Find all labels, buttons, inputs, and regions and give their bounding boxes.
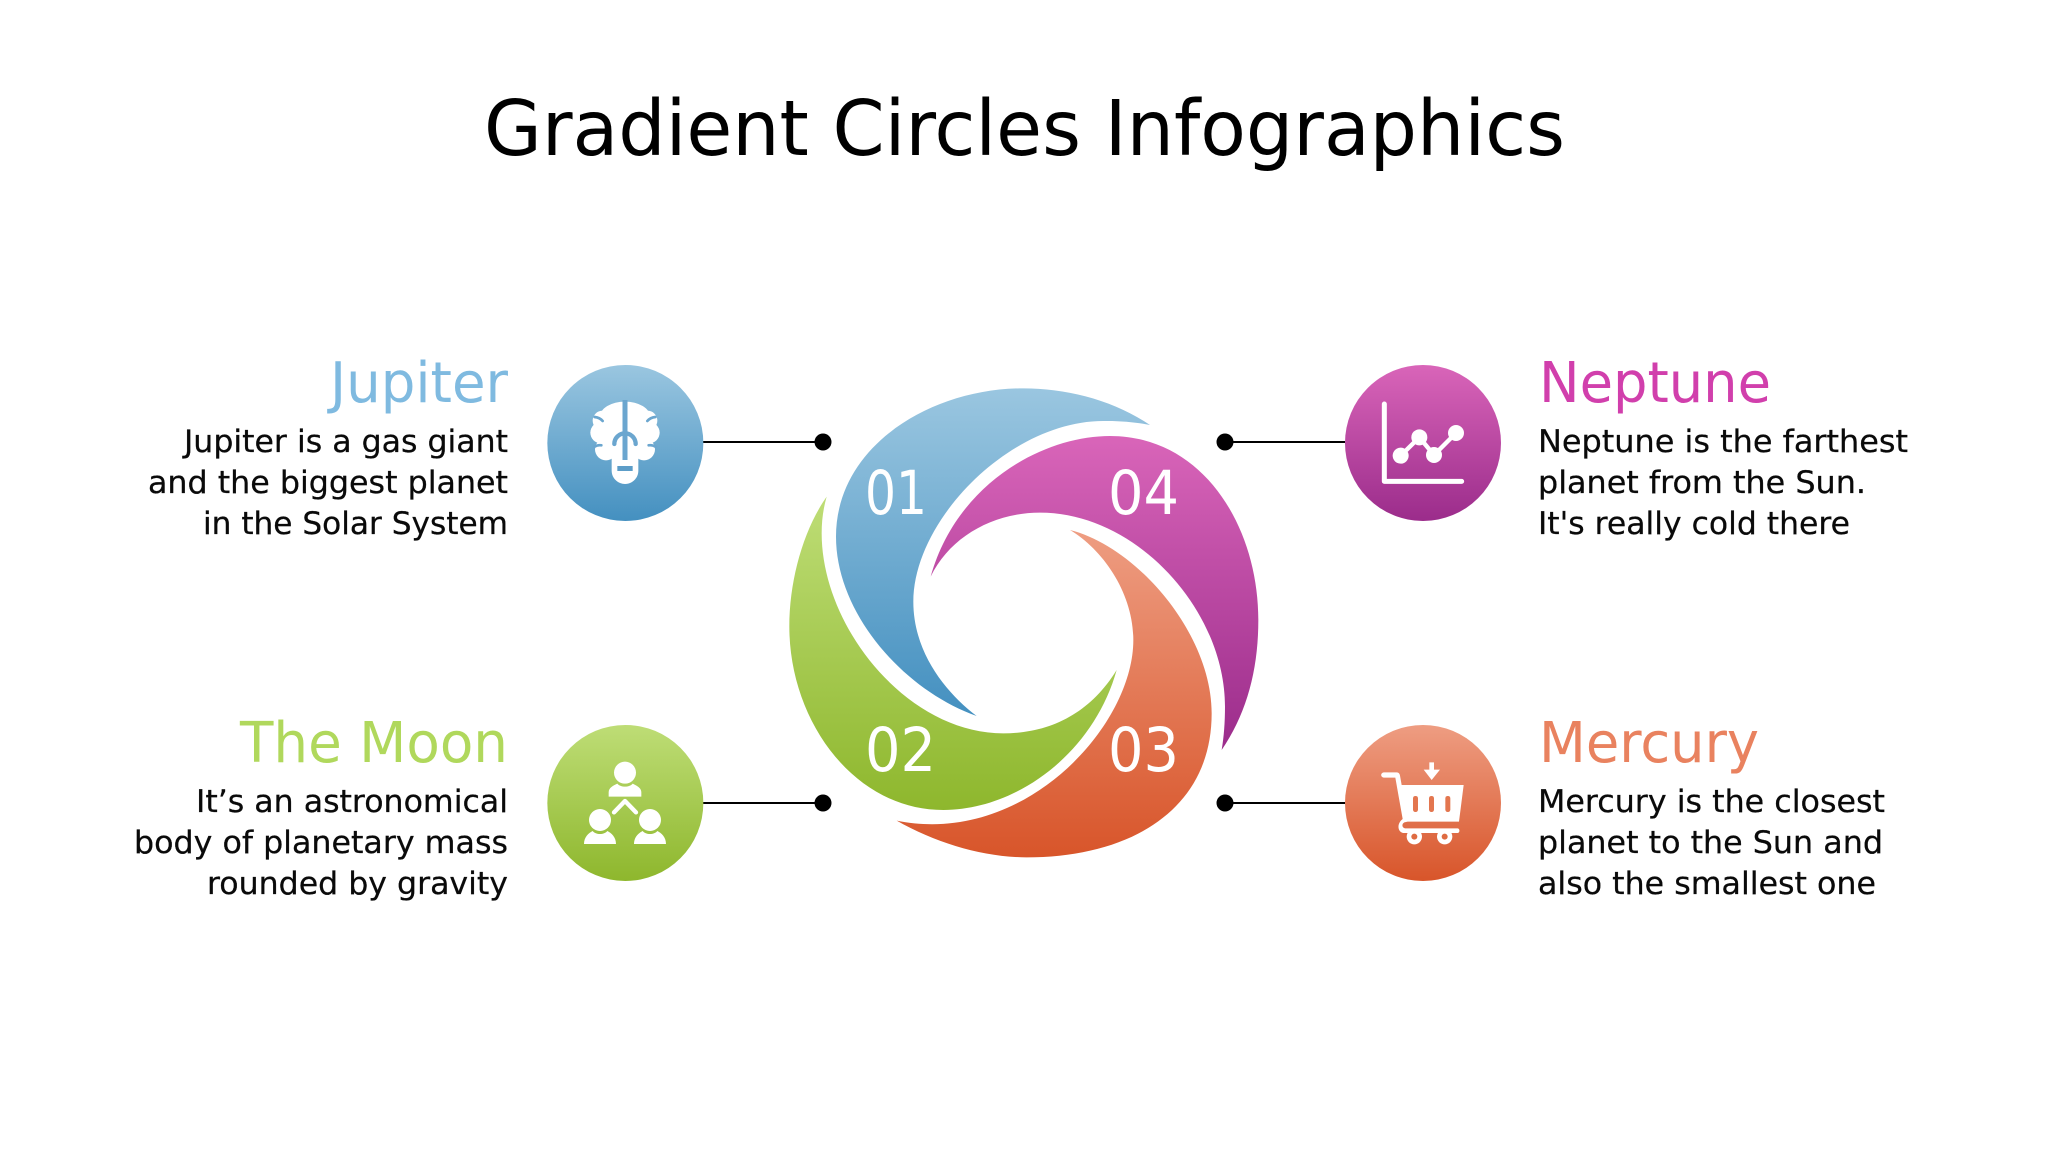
text: Neptune description: planet from the Sun. [1538,465,1866,501]
icon: shopping cart [1345,725,1501,881]
text: The Moon description: It’s an astronomical [196,784,508,820]
text: Mercury description [1538,784,1885,902]
number 02: 02 [865,715,936,786]
text: Jupiter description: in the Solar System [203,506,508,542]
heading: Neptune: Neptune [1539,351,1771,416]
icon: line chart [1345,365,1501,521]
number 01: 01 [865,458,927,529]
heading: Jupiter: Jupiter [327,351,509,416]
text: The Moon description: body of planetary mass [134,825,508,861]
text: Neptune description: Neptune is the farthest [1538,424,1908,460]
swirl segment 03 orange [897,530,1212,857]
swirl diagram [789,388,1258,857]
connector: Neptune [1216,434,1345,450]
text: Mercury description: Mercury is the closest [1538,784,1885,820]
text: Jupiter description [148,424,508,542]
connector: Jupiter [703,434,832,450]
text: The Moon description [134,784,508,902]
text: Jupiter description: and the biggest planet [148,465,508,501]
icon: brain bulb [547,365,703,521]
swirl segment 02 green [789,497,1117,810]
heading: The Moon: The Moon [239,711,508,776]
number 04: 04 [1108,458,1179,529]
swirl segment 01 blue [836,388,1150,716]
text: The Moon description: rounded by gravity [207,866,508,902]
title: Gradient Circles Infographics [484,85,1565,174]
heading: Mercury: Mercury [1539,711,1759,776]
text: Mercury description: also the smallest one [1538,866,1876,902]
swirl segment 04 magenta [931,436,1258,750]
number 03: 03 [1108,715,1179,786]
text: Neptune description [1538,424,1908,542]
connector: The Moon [703,794,832,812]
text: Mercury description: planet to the Sun and [1538,825,1883,861]
connector: Mercury [1216,794,1345,812]
icon: people network [547,725,703,881]
text: Neptune description: It's really cold there [1538,506,1850,542]
text: Jupiter description: Jupiter is a gas giant [182,424,508,460]
